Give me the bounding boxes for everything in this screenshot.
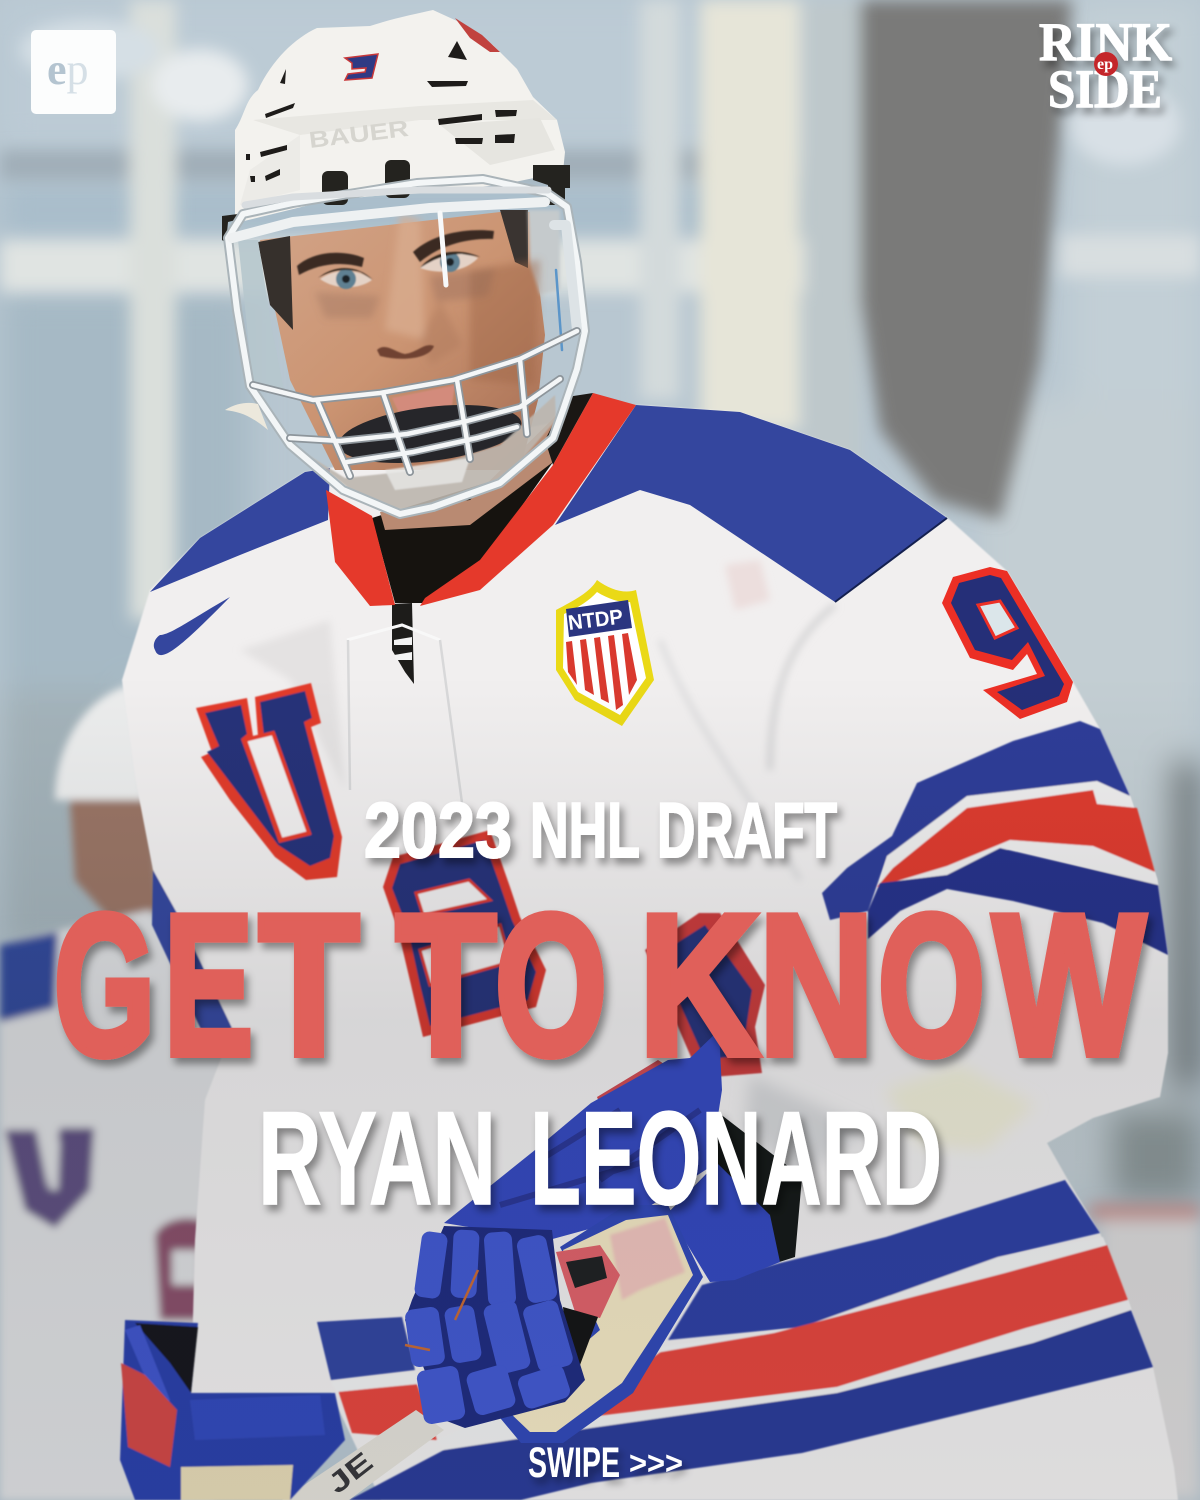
helmet: BAUER (307, 115, 410, 153)
player jersey body (122, 405, 1178, 1500)
title: get to know: E (164, 874, 253, 1097)
eliteprospects logo tile: ep (47, 45, 89, 94)
cream palm and puck logo (496, 1205, 703, 1443)
title: get to know: G (54, 874, 155, 1097)
NTDP shield crest (556, 580, 654, 726)
title: get to know: T (259, 874, 359, 1097)
blue shoulder yokes (150, 405, 947, 602)
title: get to know (54, 874, 1145, 1097)
player face (238, 210, 560, 470)
chest letter (383, 830, 765, 1078)
sleeve number 9 (942, 567, 1073, 719)
swipe prompt: SWIPE (528, 1439, 620, 1487)
title: get to know: O (878, 874, 985, 1097)
clear visor and cage (225, 179, 585, 514)
gloved fingers (404, 1226, 585, 1428)
player name: LEONARD (530, 1085, 942, 1233)
sleeve stripes (822, 721, 1168, 955)
hem stripes (317, 1180, 1153, 1500)
helmet (222, 10, 570, 243)
rink side logo (1039, 12, 1172, 119)
neck skin, red collar and undershirt (326, 393, 636, 825)
rink side logo: RINK (1039, 12, 1172, 72)
nike swoosh (154, 597, 230, 655)
title: get to know: W (993, 874, 1145, 1097)
title: get to know: K (639, 874, 759, 1097)
NTDP shield crest: NTDP (567, 605, 624, 635)
side panel stripe (152, 870, 232, 1040)
mouth guard (335, 396, 525, 472)
swipe prompt: >>> (629, 1445, 683, 1481)
player name: RYAN (258, 1085, 496, 1233)
player name (258, 1085, 942, 1233)
background teammate (0, 685, 240, 1500)
eliteprospects logo tile (31, 30, 116, 114)
subheading: 2023 NHL draft: NHL (530, 786, 640, 874)
rink side logo: ep (1097, 56, 1113, 73)
jersey folds (240, 560, 835, 880)
rink side logo: SIDE (1048, 59, 1162, 119)
title: get to know: T (396, 874, 496, 1097)
hockey stick (282, 1410, 444, 1500)
subheading: 2023 NHL draft: 2023 (364, 786, 512, 874)
clear visor lower shield (300, 395, 556, 512)
pale patch on forearm (745, 1065, 1035, 1175)
upper hand, red loop and cuff (444, 1030, 802, 1282)
title: get to know: N (759, 874, 874, 1097)
hockey stick: JE (322, 1446, 379, 1500)
letter U on jersey (196, 683, 342, 880)
subheading: 2023 NHL draft (364, 786, 837, 874)
left glove (120, 1320, 345, 1500)
subheading: 2023 NHL draft: DRAFT (657, 786, 837, 874)
title: get to know: O (495, 874, 607, 1097)
